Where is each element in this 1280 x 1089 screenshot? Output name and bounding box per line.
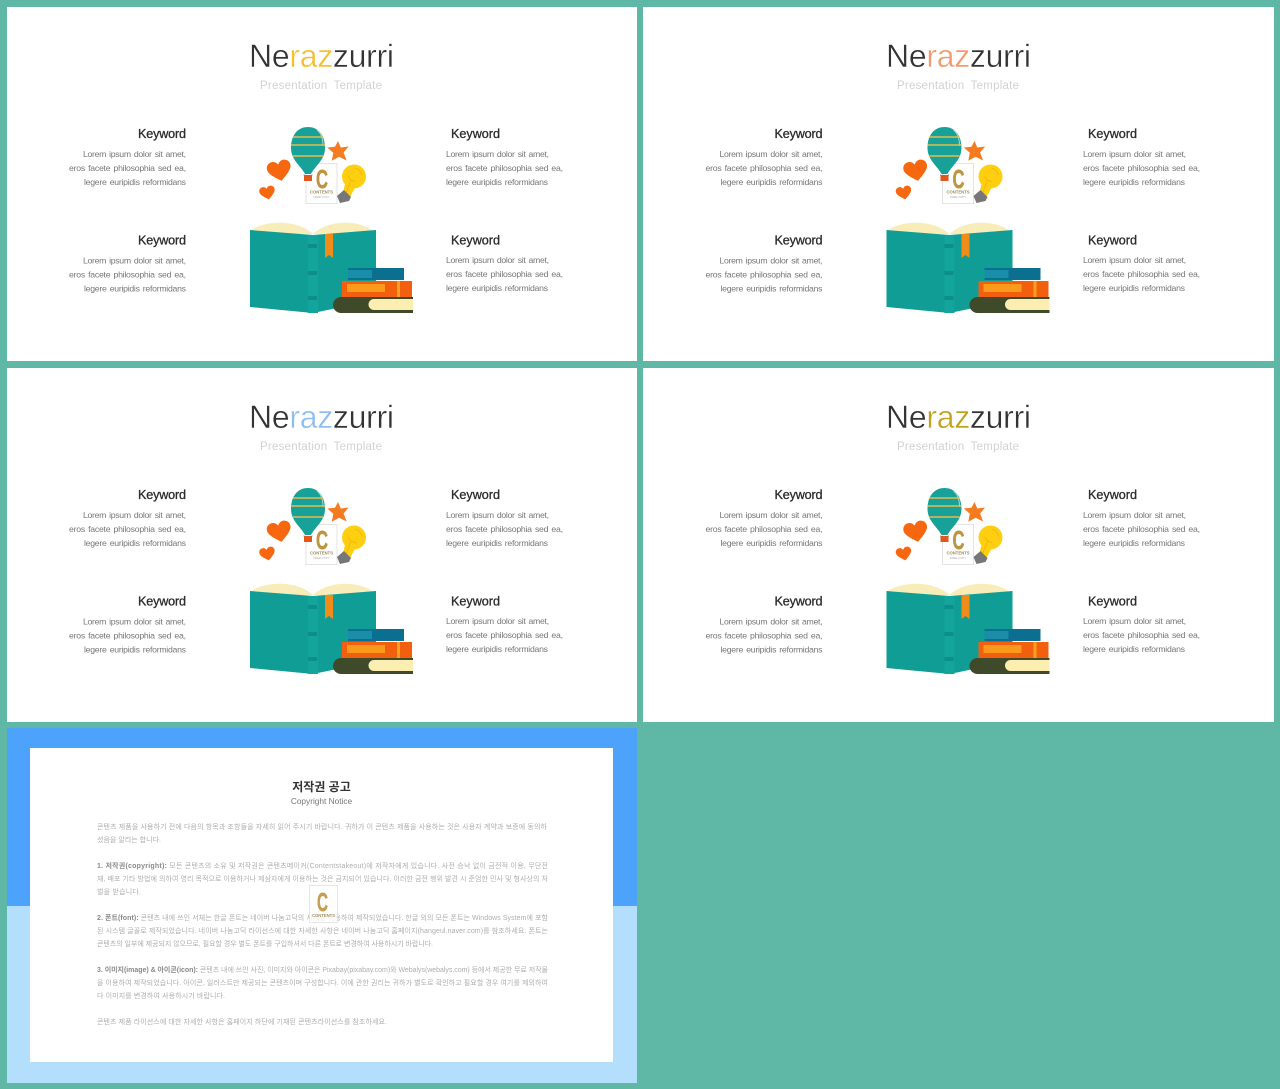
text block: bottom right: legere euripidis reformidans [1083,283,1186,293]
icon: balloon [291,488,325,542]
text block: top right: Keyword [1088,488,1137,502]
icon: contents logo watermark [310,886,338,922]
icon: contents logo [942,164,974,204]
text block: section 3 image and icon [97,965,549,1000]
icon: star [327,141,349,161]
text block: bottom right: Keyword [1088,594,1137,608]
icon: balloon [291,127,325,181]
text block: top left: Lorem ipsum dolor sit amet, [83,510,186,520]
text block: top right [446,127,563,187]
text block: section 2 font [97,913,549,948]
icon: contents logo watermark: CONTENTS [312,913,335,918]
text block: top right: Lorem ipsum dolor sit amet, [446,149,549,159]
icon: contents logo: CONTENTS [946,190,970,194]
text block: top right: Keyword [451,488,500,502]
text block: bottom left: Lorem ipsum dolor sit amet, [720,256,822,266]
icon: contents logo: C [316,164,328,194]
text block: section 1 copyright: 벌을 받습니다. [97,887,141,896]
text block: bottom right: legere euripidis reformidans [1083,644,1186,654]
text block: top left: legere euripidis reformidans [720,538,823,548]
text block: bottom left [69,234,187,294]
subtitle: Presentation Template [897,80,1019,92]
panel: copyright notice slide [7,728,637,1083]
icon: star [327,502,349,522]
text block: bottom left: Keyword [774,234,822,248]
text block: section 2 font: 2. 폰트(font): 콘텐츠 내에 쓰인 서체는 한글 폰트는 네이버 나눔고딕의 서체를 이용하여 제작되었습니다. 한글 외의 모든 폰트는 Windows System에 포함 [97,913,549,922]
icon: balloon [928,127,962,181]
text block: bottom right: Lorem ipsum dolor sit amet, [1083,616,1186,626]
text block: top right: Keyword [451,127,500,141]
text block: top right [1083,127,1200,187]
heading: copyright notice [291,779,353,806]
text block: top left: Keyword [774,127,822,141]
icon: contents logo: FREE COPY [950,556,966,560]
heading: copyright notice: Copyright Notice [291,796,353,806]
text block: bottom left [706,594,823,654]
icon: contents logo: C [952,164,965,194]
text block: bottom left: Lorem ipsum dolor sit amet, [83,616,186,626]
icon: small heart [258,546,276,562]
text block: top right [1083,488,1200,548]
text block: top right: legere euripidis reformidans [1083,177,1186,187]
panel: slide 2 coral [643,7,1274,361]
text block: bottom left: legere euripidis reformidans [720,284,823,294]
text block: top left: Lorem ipsum dolor sit amet, [720,510,822,520]
text block: top left [69,488,187,548]
text block: top left: Keyword [774,488,822,502]
text block: introduction [97,822,548,844]
text block: bottom right: Keyword [1088,234,1137,248]
text block: top left: Keyword [138,127,186,141]
text block: bottom left: Keyword [138,234,186,248]
text block: top left [706,127,823,187]
text block: section 1 copyright: 1. 저작권(copyright): 모든 콘텐츠의 소유 및 저작권은 콘텐츠메이커(Contentstakeout)에 저작자에게 있습니다. 사전 승낙 없이 금전적 이용, 무단전 [97,861,548,870]
text block: bottom left: eros facete philosophia sed ea, [69,270,186,280]
text block: license note: 콘텐츠 제품 라이선스에 대한 자세한 사항은 홈페이지 하단에 기재된 콘텐츠라이선스를 참조하세요. [97,1017,387,1026]
text block: top left: eros facete philosophia sed ea, [706,524,822,534]
text block: top right [446,488,563,548]
text block: bottom left: legere euripidis reformidans [720,644,823,654]
text block: top left: legere euripidis reformidans [84,177,187,187]
text block: top right: Lorem ipsum dolor sit amet, [1083,149,1186,159]
text block: top left: legere euripidis reformidans [84,538,187,548]
icon: book stack [970,268,1050,313]
text block: bottom right: eros facete philosophia sed ea, [446,269,563,279]
text block: top left: eros facete philosophia sed ea, [706,163,822,173]
subtitle: Presentation Template [260,441,382,453]
icon: balloon [928,488,962,542]
text block: top left: Keyword [138,488,186,502]
icon: contents logo: C [316,525,328,555]
text block: bottom right: Lorem ipsum dolor sit amet, [446,616,549,626]
text block: introduction: 콘텐츠 제품을 사용하기 전에 다음의 항목과 조항들을 자세히 읽어 주시기 바랍니다. 귀하가 이 콘텐츠 제품을 사용하는 것은 사용자 계약과 보증에 동의하 [97,822,548,831]
icon: light bulb [337,164,366,203]
text block: bottom left: eros facete philosophia sed ea, [706,630,822,640]
icon: contents logo: FREE COPY [313,195,330,199]
text block: top right: Lorem ipsum dolor sit amet, [446,510,549,520]
icon: contents logo [942,524,974,564]
text block: bottom right [1083,234,1200,293]
icon: large heart [902,158,930,183]
text block: top left: Lorem ipsum dolor sit amet, [720,149,822,159]
text block: top right: eros facete philosophia sed ea, [1083,163,1200,173]
title: Nerazzurri [249,38,394,74]
illustration: books, balloon and icons [886,488,1050,674]
subtitle: Presentation Template [260,80,382,92]
text block: top left: eros facete philosophia sed ea, [69,163,186,173]
icon: contents logo [306,524,337,564]
illustration: books, balloon and icons [250,488,413,674]
text block: top left [69,127,187,187]
text block: bottom left: Lorem ipsum dolor sit amet, [83,256,186,266]
icon: small heart [895,185,913,201]
text block: top left [706,488,823,548]
text block: section 3 image and icon: 3. 이미지(image) & 아이콘(icon): 콘텐츠 내에 쓰인 사진, 이미지와 아이콘은 Pixabay(pixabay.com)와 Webalys(webalys.com) 등에서 제공한 무료 저작물 [97,965,549,974]
text block: section 2 font: 콘텐츠의 일부에 제공되지 않으므로, 필요할 경우 별도 폰트를 구입하셔서 다른 폰트로 변경하여 사용하시기 바랍니다. [97,939,433,948]
text block: top right: eros facete philosophia sed ea, [1083,524,1200,534]
icon: star [964,502,985,522]
panel: slide 1 yellow [7,7,637,361]
text block: bottom left: Keyword [138,594,186,608]
icon: contents logo: FREE COPY [950,195,966,199]
icon: light bulb [974,164,1002,203]
icon: book stack [333,629,413,674]
text block: top left: eros facete philosophia sed ea, [69,524,186,534]
text block: top right: Lorem ipsum dolor sit amet, [1083,510,1186,520]
text block: bottom right: Keyword [451,234,500,248]
text block: top right: legere euripidis reformidans [1083,538,1186,548]
icon: large heart [266,158,293,183]
text block: bottom left: legere euripidis reformidans [84,644,187,654]
text block: top right: legere euripidis reformidans [446,538,549,548]
text block: bottom right [446,594,563,654]
icon: open book [250,223,376,313]
text block: bottom right: Keyword [451,594,500,608]
text block: bottom right [1083,594,1200,654]
text block: top right: legere euripidis reformidans [446,177,549,187]
icon: contents logo: FREE COPY [313,556,330,560]
title: Nerazzurri [249,399,394,435]
illustration: books, balloon and icons [886,127,1050,313]
text block: bottom right: eros facete philosophia sed ea, [446,630,563,640]
icon: light bulb [337,526,366,564]
title: Nerazzurri [886,399,1031,435]
text block: bottom left: eros facete philosophia sed ea, [706,270,822,280]
text block: bottom right: eros facete philosophia sed ea, [1083,630,1200,640]
text block: bottom left: Lorem ipsum dolor sit amet, [720,616,822,626]
icon: light bulb [974,526,1002,564]
icon: contents logo: C [952,525,965,555]
text block: bottom right: legere euripidis reformidans [446,644,549,654]
icon: open book [886,223,1012,313]
panel: slide 4 gold [643,368,1274,722]
text block: bottom left: eros facete philosophia sed ea, [69,630,186,640]
text block: top left: Lorem ipsum dolor sit amet, [83,149,186,159]
heading: copyright notice: 저작권 공고 [292,779,351,794]
icon: open book [886,584,1012,674]
subtitle: Presentation Template [897,441,1019,453]
text block: top right: eros facete philosophia sed ea, [446,524,563,534]
title: Nerazzurri [886,38,1031,74]
text block: bottom left: legere euripidis reformidans [84,284,187,294]
text block: section 2 font: 된 시스템 글꼴로 제작되었습니다. 네이버 나눔고딕 라이선스에 대한 자세한 사항은 네이버 나눔고딕 홈페이지(hangeul.naver.com)를 참조하세요. 폰트는 [97,926,549,935]
icon: contents logo: CONTENTS [946,550,970,556]
text block: bottom right: eros facete philosophia sed ea, [1083,269,1200,279]
text block: bottom left [706,234,823,294]
text block: section 3 image and icon: 다 이미지를 변경하여 사용하시기 바랍니다. [97,991,225,1000]
text block: section 1 copyright: 재, 배포 기타 방법에 의하여 영리 목적으로 이용하거나 제삼자에게 이용하는 것은 금지되어 있습니다. 이러한 금전 행위 발견 시 준엄한 민사 및 형사상의 처 [97,874,548,883]
icon: large heart [902,519,930,544]
text block: bottom left: Keyword [774,594,822,608]
text block: bottom right: Lorem ipsum dolor sit amet, [446,255,549,265]
text block: section 1 copyright [97,861,548,896]
icon: book stack [333,268,413,313]
panel: slide 3 blue [7,368,637,722]
icon: large heart [266,519,293,544]
icon: book stack [970,629,1050,674]
icon: contents logo: CONTENTS [310,190,333,194]
text block: top right: Keyword [1088,127,1137,141]
icon: small heart [258,185,276,201]
icon: small heart [895,546,913,562]
icon: contents logo watermark: C [317,887,328,917]
text block: bottom right: legere euripidis reformidans [446,283,549,293]
icon: contents logo [306,164,337,204]
text block: section 3 image and icon: 을 이용하여 제작되었습니다. 아이콘, 일러스트만 제공되는 콘텐츠이며 구성합니다. 이에 관한 권리는 귀하가 별도로 확인하고 필요할 경우 여기를 제외하여 [97,978,548,987]
icon: star [964,141,985,161]
text block: introduction: 셨음을 알리는 합니다. [97,835,161,844]
text block: top right: eros facete philosophia sed ea, [446,163,563,173]
text block: top left: legere euripidis reformidans [720,177,823,187]
icon: open book [250,584,376,674]
text block: bottom right [446,234,563,293]
illustration: books, balloon and icons [250,127,413,313]
icon: contents logo: CONTENTS [310,550,333,556]
text block: bottom left [69,594,187,654]
text block: bottom right: Lorem ipsum dolor sit amet, [1083,255,1186,265]
